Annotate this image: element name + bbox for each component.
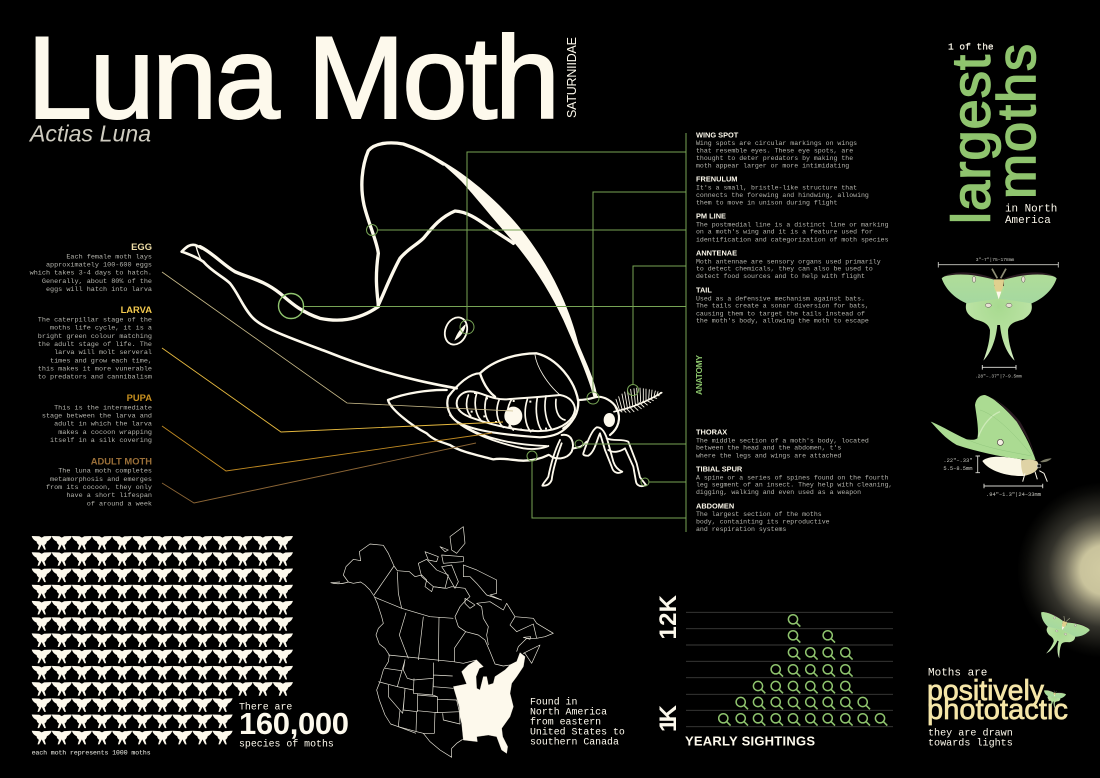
illustration: moth side view with measurements (931, 395, 1052, 498)
anatomy vertical label: ANATOMY (694, 355, 704, 395)
map caption: North America (530, 706, 607, 717)
stat: 160,000 species: species of moths (239, 738, 334, 749)
panel: phototactic callout: Moths are (928, 668, 987, 680)
adult moth text (46, 456, 152, 508)
frenulum (696, 175, 869, 206)
tibial spur: A spine or a series of spines found on the fourth (696, 474, 889, 481)
antenna (613, 388, 662, 412)
stat: 160,000 species: 160,000 (239, 706, 349, 741)
adult moth text: The luna moth completes (58, 468, 152, 476)
larva text: larva will molt serveral (54, 349, 152, 357)
pm line: on a moth's wing and it is a feature used for (696, 229, 873, 236)
map caption: Found in (530, 696, 577, 707)
larva text: moths life cycle, it is a (50, 325, 152, 333)
tibial spur (696, 465, 892, 496)
pupa text: stage between the larva and (42, 412, 152, 420)
antennae: detect food sources and to help with flight (696, 273, 865, 280)
egg text: Generally, about 80% of the (42, 278, 152, 286)
adult moth text: metamorphosis and emerges (50, 476, 152, 484)
larva text: to predators and cannibalism (38, 374, 152, 382)
adult moth text: from its cocoon, they only (46, 484, 152, 492)
frenulum: them to move in unison during flight (696, 199, 838, 206)
panel: phototactic callout (927, 668, 1068, 750)
thorax: THORAX (696, 428, 727, 437)
egg text: Each female moth lays (66, 253, 152, 261)
frenulum: It's a small, bristle-like structure that (696, 184, 857, 191)
wing spot: that resemble eyes. These eye spots, are (696, 148, 853, 154)
wing spot: Wing spots are circular markings on wings (696, 140, 857, 147)
larva text: bright green colour matching (38, 333, 152, 341)
antennae: to detect chemicals, they can also be used to (696, 266, 873, 273)
thorax: where the legs and wings are attached (696, 452, 841, 459)
egg text: EGG (131, 241, 152, 252)
wing spot: thought to deter predators by making the (696, 155, 853, 162)
panel: phototactic callout: they are drawn (928, 728, 1013, 740)
pictogram: 160 moths grid (32, 536, 293, 744)
illustration: moth side view with measurements: .94"–1.3"|24–33mm (986, 492, 1041, 498)
abdomen: The largest section of the moths (696, 511, 822, 518)
pupa text: makes a cocoon wrapping (58, 429, 152, 437)
chart: yearly sightings (655, 594, 893, 749)
panel: largest moths callout: in North (1005, 204, 1057, 216)
chart: yearly sightings: YEARLY SIGHTINGS (685, 734, 815, 749)
leader lines: anatomy (278, 133, 686, 532)
pm line: PM LINE (696, 212, 726, 221)
panel: largest moths callout: 1 of the (948, 41, 994, 52)
pictogram caption: each moth represents 1000 moths (32, 749, 151, 756)
antennae: ANNTENAE (696, 249, 737, 258)
anatomy illustration: moth line drawing (182, 143, 662, 486)
antennae (696, 249, 881, 280)
map caption: southern Canada (530, 736, 619, 747)
tail (696, 286, 869, 325)
map caption: from eastern (530, 716, 601, 727)
map caption (530, 696, 625, 747)
eastern range highlight (453, 653, 525, 753)
stat: 160,000 species: There are (239, 701, 292, 712)
larva text: the adult stage of life. The (38, 341, 152, 349)
egg text (30, 241, 152, 294)
adult moth text: ADULT MOTH (91, 456, 152, 467)
tail: the moth's body, allowing the moth to escape (696, 318, 869, 325)
panel: largest moths callout (942, 41, 1057, 227)
tail: The tails create a sonar diversion for bats, (696, 303, 869, 310)
wing spot: moth appear larger or more intimidating (696, 162, 849, 170)
egg text: which takes 3-4 days to hatch. (30, 270, 152, 278)
family label: SATURNIIDAE (565, 37, 579, 118)
pm line (696, 212, 889, 243)
panel: phototactic callout: towards lights (928, 738, 1013, 750)
frenulum: FRENULUM (696, 175, 737, 184)
larva text: this makes it more vunerable (38, 366, 152, 374)
small moth on text (1041, 689, 1066, 710)
abdomen: body, containting its reproductive (696, 519, 830, 526)
antennae: Moth antennae are sensory organs used primarily (696, 258, 881, 265)
illustration: moth top view with wingspan (938, 257, 1058, 380)
abdomen (696, 501, 830, 533)
light glow (1017, 482, 1100, 658)
egg text: approximately 100-600 eggs (46, 262, 152, 270)
larva text: LARVA (121, 304, 152, 315)
pupa text (42, 392, 152, 445)
tibial spur: TIBIAL SPUR (696, 465, 743, 474)
pupa text: adult in which the larva (54, 421, 152, 429)
wings (182, 143, 597, 397)
map caption: United States to (530, 726, 625, 737)
pm line: The postmedial line is a distinct line or marking (696, 221, 889, 228)
tail: Used as a defensive mechanism against bats. (696, 295, 865, 302)
chart: yearly sightings: 1K (655, 704, 682, 732)
wing spot: WING SPOT (696, 130, 739, 139)
thorax (696, 428, 869, 459)
tail: TAIL (696, 286, 712, 295)
pupa text: itself in a silk covering (50, 437, 152, 445)
tail: causing them to target the tails instead of (696, 310, 865, 317)
thorax: between the head and the abdomen, t's (696, 445, 841, 452)
abdomen: and respiration systems (696, 526, 786, 533)
pm line: identification and categorization of moth species (696, 236, 889, 243)
tibial spur: digging, walking and even used as a weapon (696, 489, 861, 496)
panel: anatomy text (694, 130, 892, 533)
adult moth text: have a short lifespan (66, 492, 152, 500)
illustration: moth side view with measurements: 5.5–8.5mm (943, 466, 972, 472)
illustration: moth top view with wingspan: 3"–7"|75–178mm (976, 257, 1015, 263)
thorax: The middle section of a moth's body, located (696, 437, 869, 444)
panel: largest moths callout: moths (987, 44, 1047, 199)
title: Luna Moth (27, 12, 560, 143)
panel: largest moths callout: America (1005, 215, 1051, 227)
panel: largest moths callout: largest (942, 55, 1002, 224)
frenulum: connects the forewing and hindwing, allowing (696, 192, 869, 199)
panel: life cycle text (30, 241, 152, 508)
pupa text: This is the intermediate (54, 404, 152, 412)
magnifying glass icons (719, 615, 887, 726)
illustration: moth side view with measurements: .22"–.33" (943, 458, 972, 464)
larva text (38, 304, 152, 382)
panel: phototactic callout: phototactic (927, 694, 1068, 726)
abdomen: ABDOMEN (696, 501, 734, 510)
larva text: times and grow each time, (50, 357, 152, 365)
map: North America range (331, 527, 553, 757)
subtitle: scientific name: Actias Luna (28, 120, 151, 146)
leader lines: life cycle (162, 272, 513, 503)
illustration: moth top view with wingspan: .28"–.37"|7–9.5mm (975, 374, 1022, 380)
larva text: The caterpillar stage of the (38, 317, 152, 325)
body (388, 353, 662, 486)
egg text: eggs will hatch into larva (46, 286, 152, 294)
wing spot (696, 130, 857, 170)
panel: phototactic callout: positively (927, 675, 1045, 707)
adult moth text: of around a week (87, 500, 152, 508)
tibial spur: leg segment of an insect. They help with cleaning, (696, 482, 892, 489)
pupa text: PUPA (127, 392, 152, 403)
chart: yearly sightings: 12K (655, 594, 682, 640)
moth flying to light (1028, 608, 1091, 665)
